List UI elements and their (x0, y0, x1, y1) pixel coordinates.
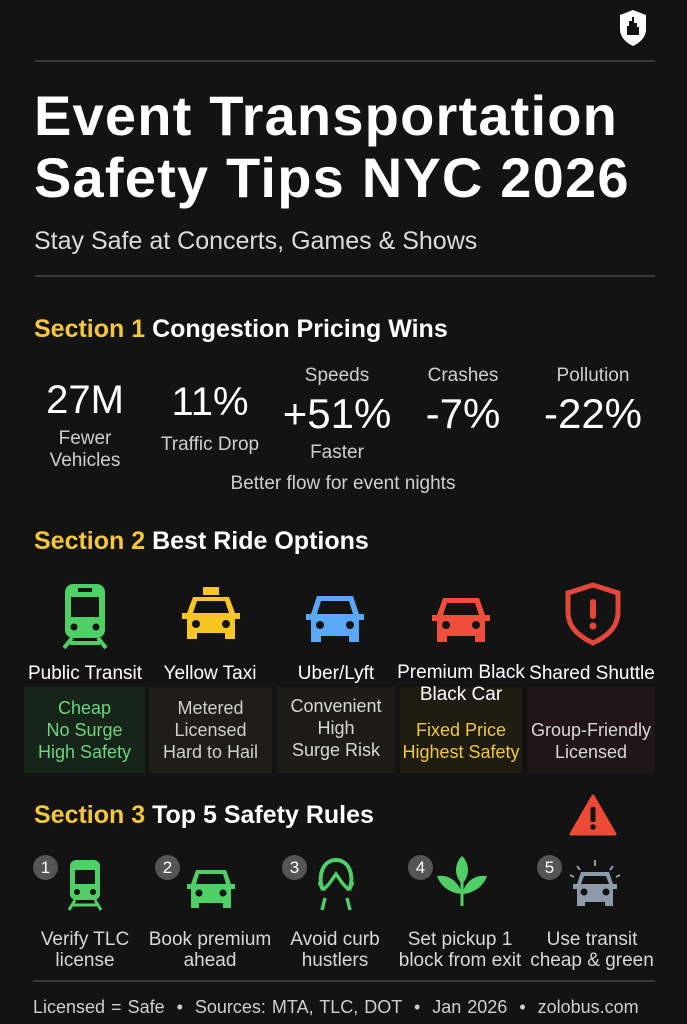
option labels: Premium Black (397, 662, 525, 683)
stat: speeds (283, 365, 391, 463)
rule 3: 3 (290, 858, 299, 877)
rule 4: 4 (416, 858, 425, 877)
rule 5: cheap & green (530, 950, 654, 971)
rules (33, 855, 654, 971)
caption: Better flow for event nights (231, 473, 455, 494)
rule 2: ahead (184, 950, 236, 971)
section 3 heading: Section 3 Top 5 Safety Rules (34, 801, 374, 829)
stat: speeds: +51% (283, 390, 391, 437)
box: uber (277, 687, 395, 773)
rule 1: 1 (41, 858, 50, 877)
box: black car: Fixed Price (416, 720, 506, 740)
rule 1: Verify TLC (41, 929, 129, 950)
rule 4 (399, 855, 522, 971)
stat: 11%: Traffic Drop (161, 434, 259, 455)
logo (620, 10, 646, 46)
box: transit: Cheap (58, 698, 111, 718)
box: transit: High Safety (38, 742, 131, 762)
stat: 27M (46, 378, 124, 471)
box: black car: Highest Safety (402, 742, 520, 762)
icon: car blue (306, 596, 364, 642)
icon: car red (432, 598, 490, 642)
rule 1 (33, 855, 129, 971)
box: shuttle: Licensed (555, 742, 627, 762)
option labels: Uber/Lyft (298, 663, 374, 684)
box: shuttle: Group-Friendly (531, 720, 651, 740)
box: transit: No Surge (46, 720, 123, 740)
option labels: Black Car (420, 684, 502, 705)
box: taxi (149, 687, 272, 773)
box: uber: Surge Risk (292, 740, 380, 760)
rule 2: 2 (163, 858, 172, 877)
rule 5: Use transit (547, 929, 637, 950)
option labels: Public Transit (28, 663, 142, 684)
box: transit (24, 687, 145, 773)
stat: 27M: 27M (46, 378, 124, 422)
stat: pollution: Pollution (557, 365, 629, 386)
icon: shield (566, 582, 620, 646)
icon: train (62, 584, 108, 650)
footer: Licensed = Safe • Sources: MTA, TLC, DOT • Jan 2026 • zolobus.com (33, 997, 639, 1017)
title (34, 84, 630, 209)
section 1 heading: Section 1 Congestion Pricing Wins (34, 315, 448, 343)
stat: crashes (426, 365, 500, 437)
stat: pollution (544, 365, 642, 437)
rule 2: Book premium (149, 929, 271, 950)
box: shuttle (527, 687, 655, 773)
title: Safety Tips NYC 2026 (34, 146, 630, 209)
rule 4: block from exit (399, 950, 521, 971)
stat: crashes: Crashes (428, 365, 498, 386)
stat: speeds: Faster (310, 442, 364, 463)
section 2 heading: Section 2 Best Ride Options (34, 527, 369, 555)
subtitle: Stay Safe at Concerts, Games & Shows (34, 227, 477, 255)
stat: 11% (161, 380, 259, 455)
stat: 27M: Fewer (59, 428, 111, 449)
rule 4: Set pickup 1 (408, 929, 512, 950)
box: uber: High (317, 718, 355, 738)
option labels: Yellow Taxi (164, 663, 256, 684)
box: taxi: Licensed (174, 720, 247, 740)
title: Event Transportation (34, 84, 618, 147)
stats (46, 365, 642, 494)
rule 1: license (55, 950, 115, 971)
box: uber: Convenient (290, 696, 382, 716)
box: taxi: Hard to Hail (163, 742, 258, 762)
option labels: Shared Shuttle (529, 663, 655, 684)
rule 3: Avoid curb (290, 929, 380, 950)
rule 3: hustlers (302, 950, 368, 971)
stat: crashes: -7% (426, 390, 500, 437)
icon: taxi (182, 587, 240, 639)
stat: speeds: Speeds (305, 365, 369, 386)
stat: 11%: 11% (171, 380, 249, 424)
box: taxi: Metered (177, 698, 244, 718)
icon: warning (570, 794, 617, 836)
box: black car (400, 687, 522, 773)
rule 5 (530, 855, 654, 971)
rule 5: 5 (545, 858, 554, 877)
stat: pollution: -22% (544, 390, 642, 437)
option labels (28, 662, 655, 705)
rule 3 (282, 855, 380, 971)
stat: 27M: Vehicles (50, 450, 120, 471)
rule 2 (149, 855, 271, 971)
